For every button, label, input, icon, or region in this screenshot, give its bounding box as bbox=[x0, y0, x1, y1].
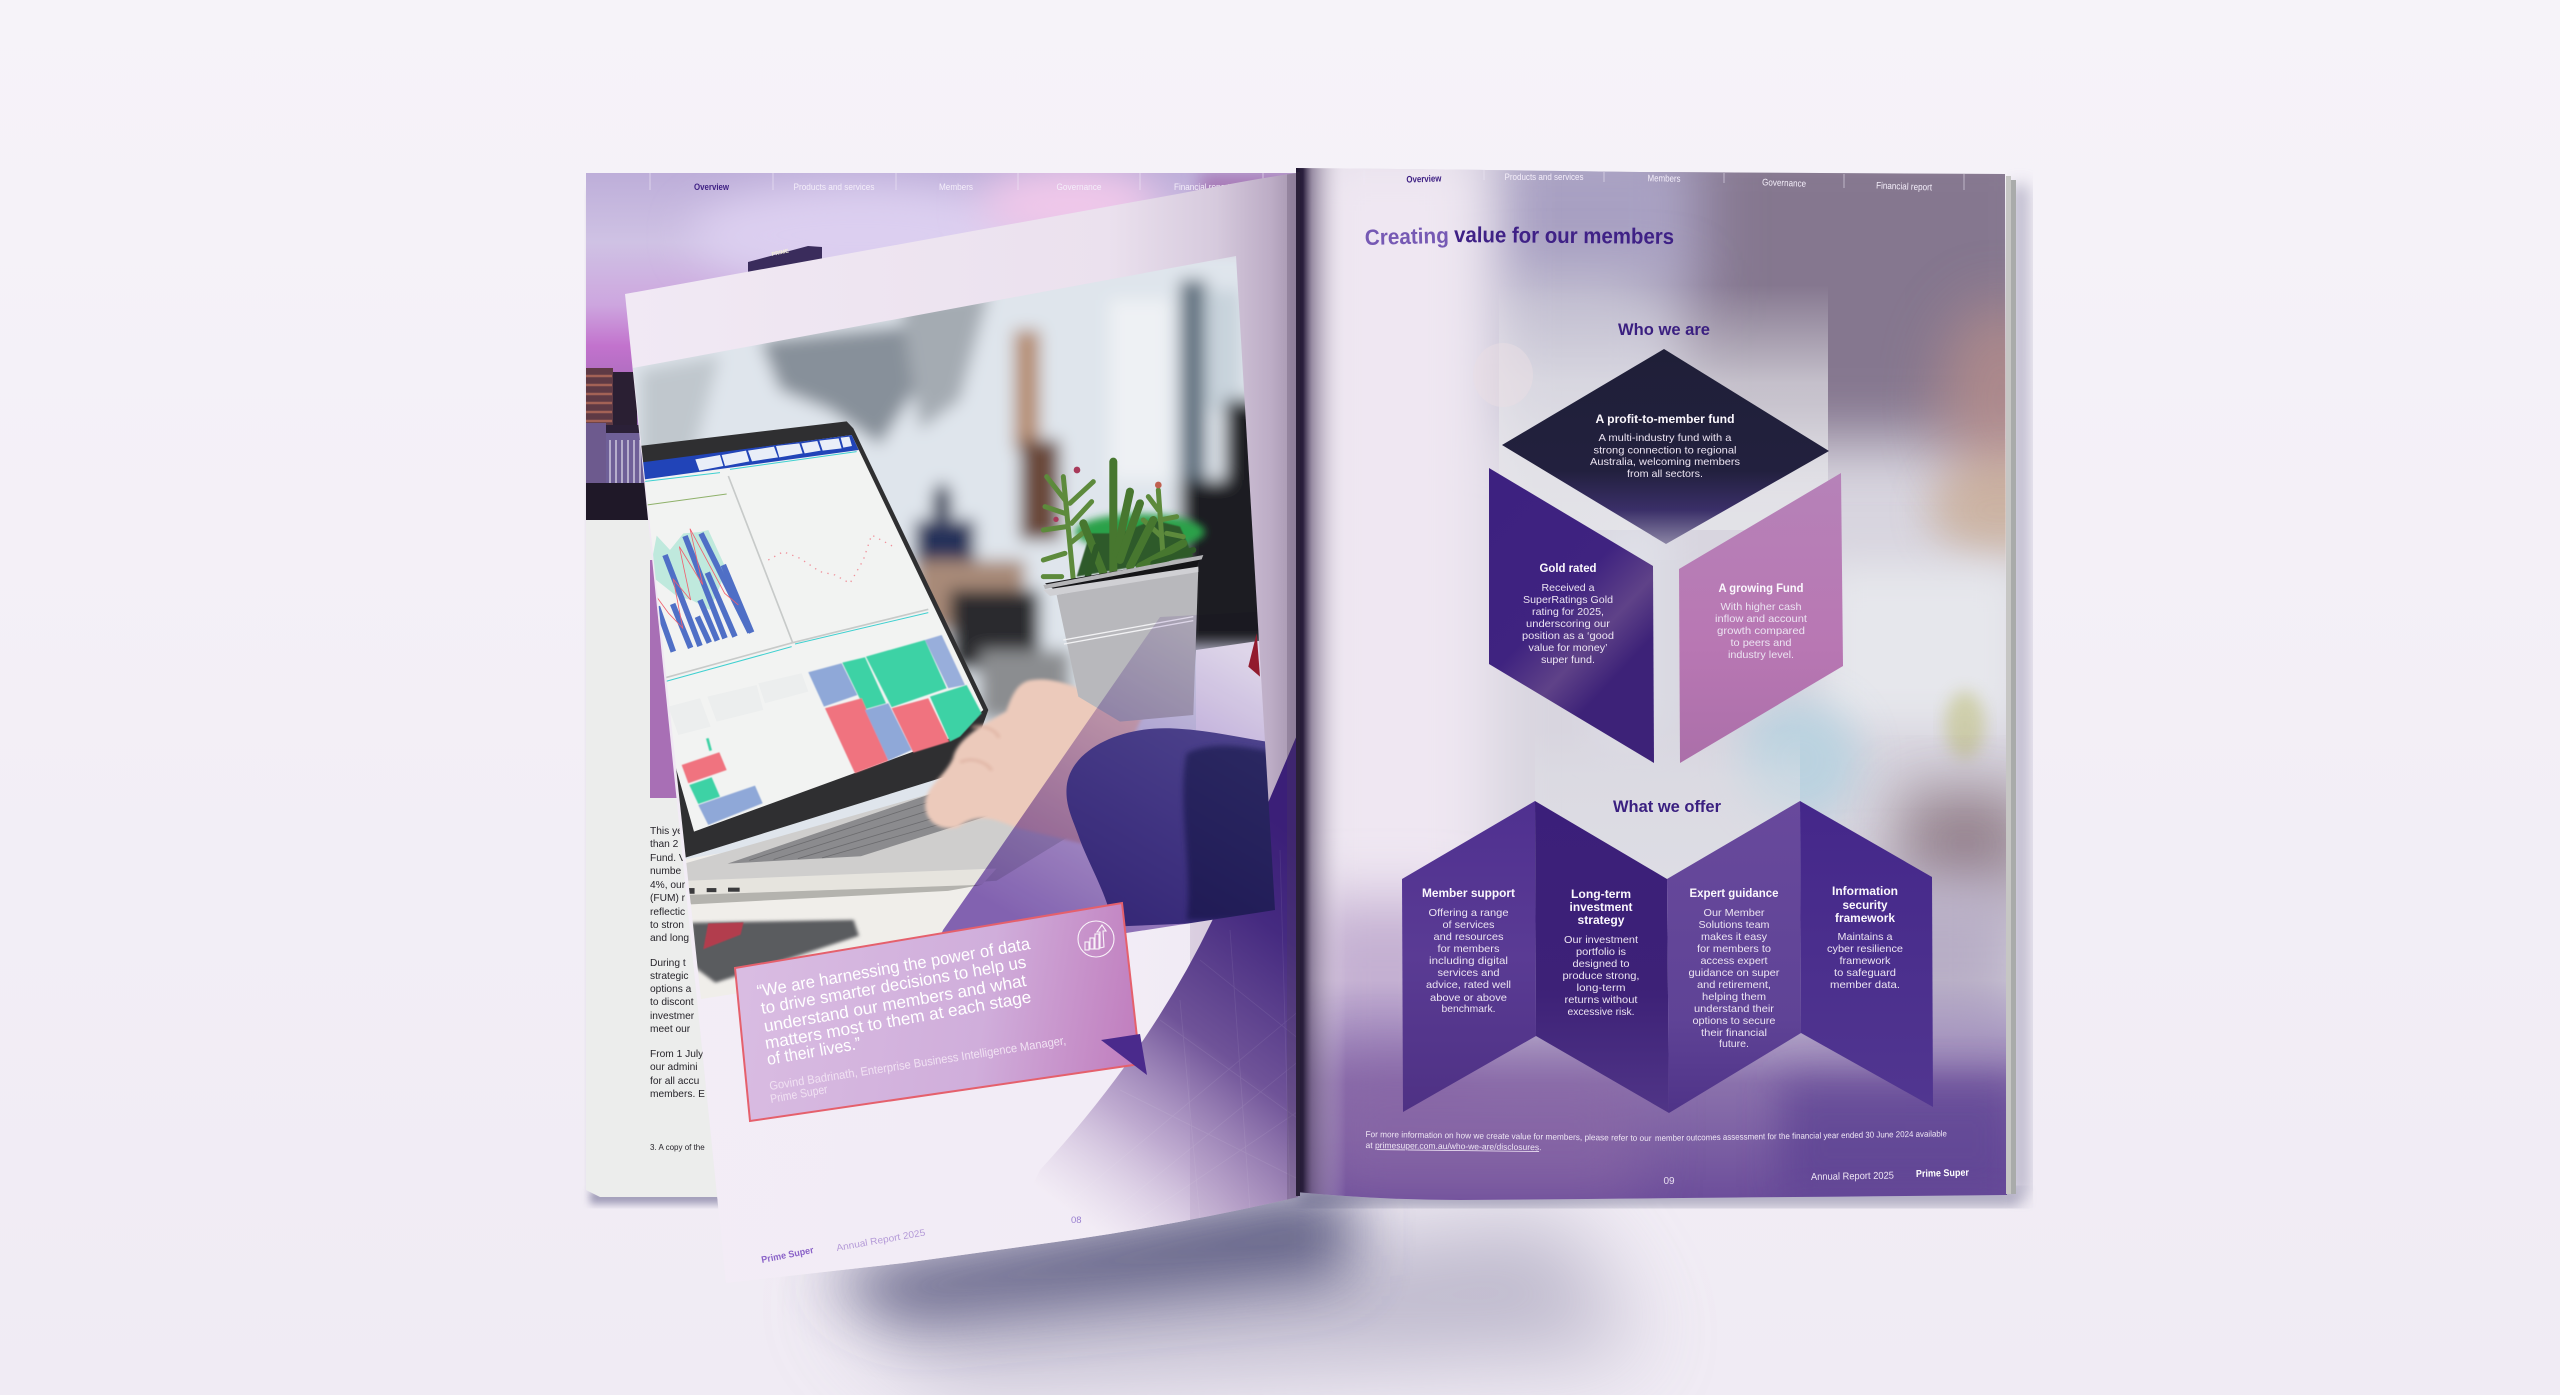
footer left bbox=[760, 1215, 1082, 1266]
panel: information security framework: framework bbox=[1840, 955, 1891, 967]
panel: information security framework: framework bbox=[1835, 913, 1896, 925]
dashboard chart: faint red dots bbox=[768, 535, 897, 583]
panel: gold rated: position as a ‘good bbox=[1522, 630, 1614, 642]
panel: long-term investment strategy: investment bbox=[1570, 902, 1633, 914]
photo: laptop on desk bbox=[620, 250, 1290, 1010]
heading: who we are: Who we are bbox=[1618, 320, 1710, 339]
quote text: of their lives.” bbox=[765, 1034, 863, 1069]
panel: gold rated: value for money’ bbox=[1528, 642, 1608, 654]
body text fragments left page: (FUM) r bbox=[650, 893, 686, 904]
city buildings bbox=[586, 368, 650, 520]
panel: information security framework: security bbox=[1842, 900, 1888, 912]
title: value for our members bbox=[1454, 222, 1674, 249]
spine bbox=[1296, 172, 1300, 1196]
panel: member support: services and bbox=[1438, 967, 1500, 979]
quote callout bbox=[735, 903, 1147, 1121]
building on sky: PRIME bbox=[771, 248, 790, 258]
body text fragments left page: options a bbox=[650, 984, 692, 995]
purple panel bbox=[650, 560, 810, 798]
nav tabs right bbox=[1364, 170, 1964, 193]
left underlying page bbox=[586, 167, 1300, 1197]
panel: information security framework bbox=[1800, 801, 1933, 1107]
panel: gold rated: super fund. bbox=[1541, 654, 1595, 666]
footnote: member outcomes assessment for the financial year ended 30 June 2024 available bbox=[1655, 1128, 1947, 1143]
blurred office background bbox=[633, 256, 1259, 859]
panel: gold rated: Received a bbox=[1542, 582, 1595, 594]
quote text: matters most to them at each stage bbox=[763, 987, 1033, 1053]
table bbox=[1196, 640, 1265, 742]
footer right: 09 bbox=[1663, 1176, 1675, 1187]
body text fragments left page: From 1 July bbox=[650, 1049, 704, 1060]
body text fragments left page: our admini bbox=[650, 1062, 698, 1073]
panel: long-term investment strategy: excessive risk. bbox=[1568, 1006, 1634, 1018]
dashboard chart: teal area bbox=[652, 530, 727, 610]
panel: expert guidance: future. bbox=[1719, 1038, 1749, 1050]
body text fragments left page: to stron bbox=[650, 920, 684, 931]
panel: information security framework: cyber resilience bbox=[1827, 943, 1903, 955]
body text fragments left page bbox=[650, 826, 705, 1152]
body text fragments left page: This ye bbox=[650, 826, 683, 837]
spine shadow bbox=[1296, 160, 1346, 1210]
panel: profit-to-member fund: Australia, welcoming members bbox=[1590, 456, 1740, 468]
curled left page bbox=[600, 160, 1310, 1300]
building on sky bbox=[748, 246, 822, 272]
blurred photo background bbox=[1300, 168, 2007, 1200]
nav tabs left: Products and services bbox=[794, 182, 875, 193]
panel: expert guidance: options to secure bbox=[1692, 1015, 1776, 1027]
panel: expert guidance: and retirement, bbox=[1697, 979, 1771, 991]
panel: member support: for members bbox=[1438, 943, 1500, 955]
panel: long-term investment strategy: strategy bbox=[1578, 915, 1625, 927]
bright green background blur bbox=[1075, 514, 1205, 550]
hand bbox=[925, 679, 1142, 844]
corner notch bbox=[1101, 1034, 1147, 1075]
body text fragments left page: than 2 bbox=[650, 839, 679, 850]
nav tabs left bbox=[650, 173, 1263, 193]
body text fragments left page: 4%, our bbox=[650, 880, 686, 891]
title: Creating bbox=[1364, 223, 1449, 250]
panel: long-term investment strategy: Long-term bbox=[1571, 889, 1631, 901]
attribution: Prime Super bbox=[769, 1082, 829, 1106]
panel: long-term investment strategy: portfolio is bbox=[1576, 946, 1626, 958]
panel: gold rated: rating for 2025, bbox=[1532, 606, 1604, 618]
footer left: Prime Super bbox=[760, 1245, 815, 1266]
quote text: to drive smarter decisions to help us bbox=[759, 953, 1028, 1018]
panel: profit-to-member fund: from all sectors. bbox=[1627, 468, 1703, 480]
laptop base bbox=[667, 758, 1103, 983]
spine darkening on page bbox=[1287, 173, 1298, 1200]
panel: profit-to-member fund bbox=[1502, 349, 1829, 544]
nav tabs right: Products and services bbox=[1504, 172, 1584, 183]
heading: what we offer: What we offer bbox=[1613, 797, 1721, 816]
panel: member support: advice, rated well bbox=[1426, 979, 1511, 991]
nav tabs right: Governance bbox=[1762, 177, 1806, 190]
panel: information security framework: to safeguard bbox=[1834, 967, 1896, 979]
panel: member support: benchmark. bbox=[1442, 1003, 1496, 1015]
panel: gold rated bbox=[1489, 468, 1654, 763]
leaves bbox=[1077, 520, 1193, 577]
panel dividers bbox=[663, 476, 928, 678]
phone on table bbox=[691, 920, 859, 983]
panel: member support: including digital bbox=[1429, 955, 1508, 967]
panel: member support: Member support bbox=[1422, 888, 1515, 900]
panel: member support: above or above bbox=[1430, 992, 1507, 1004]
widget blocks bbox=[682, 738, 763, 825]
body text fragments left page: investmer bbox=[650, 1011, 695, 1022]
panel: long-term investment strategy: Our investment bbox=[1564, 934, 1638, 946]
body text fragments left page: and long bbox=[650, 933, 689, 944]
nav tabs left: Governance bbox=[1056, 182, 1102, 193]
panel: expert guidance: guidance on super bbox=[1688, 967, 1780, 979]
body text fragments left page: meet our bbox=[650, 1024, 691, 1035]
metal pot bbox=[1057, 568, 1198, 722]
panel: expert guidance: helping them bbox=[1702, 991, 1766, 1003]
dashboard chart: red line bbox=[656, 529, 738, 628]
panel: information security framework: Maintains a bbox=[1838, 931, 1893, 943]
panel: growing fund: inflow and account bbox=[1715, 613, 1807, 625]
panel: expert guidance: understand their bbox=[1694, 1003, 1775, 1015]
center band bbox=[1473, 285, 1828, 890]
icon: bar chart in circle bbox=[1078, 921, 1114, 957]
panel: gold rated: Gold rated bbox=[1540, 563, 1596, 575]
footer left: 08 bbox=[1071, 1215, 1082, 1226]
body text fragments left page: Fund. V bbox=[650, 853, 686, 864]
panel: gold rated: underscoring our bbox=[1526, 618, 1611, 630]
nav tabs right: Financial report bbox=[1876, 181, 1933, 193]
purple corner shape bbox=[1044, 738, 1298, 1230]
body text fragments left page: During t bbox=[650, 958, 686, 969]
body text fragments left page: strategic bbox=[650, 971, 689, 982]
footnote bbox=[1365, 1128, 1947, 1152]
nav tabs right: Members bbox=[1647, 173, 1681, 185]
panel: expert guidance: their financial bbox=[1701, 1027, 1767, 1039]
translucent purple overlay bbox=[930, 610, 1290, 960]
panel: information security framework: Information bbox=[1832, 886, 1898, 898]
KPI cards bbox=[668, 673, 808, 735]
nav tabs left: Financial report bbox=[1174, 182, 1230, 193]
body text fragments left page: for all accu bbox=[650, 1076, 699, 1087]
pot rim inside bbox=[1045, 557, 1200, 593]
panel: growing fund bbox=[1679, 473, 1843, 763]
quote text: “We are harnessing the power of data bbox=[755, 934, 1032, 1001]
sleeve bbox=[1066, 633, 1280, 927]
panel: expert guidance: Expert guidance bbox=[1690, 888, 1778, 900]
panel: growing fund: growth compared bbox=[1717, 625, 1805, 637]
panel: profit-to-member fund: strong connection to regional bbox=[1594, 444, 1736, 456]
body text fragments left page: reflectic bbox=[650, 907, 685, 918]
footer left: Annual Report 2025 bbox=[836, 1227, 926, 1254]
footer right bbox=[1663, 1168, 1969, 1187]
right page bbox=[1296, 168, 2007, 1200]
potted plant bbox=[1043, 462, 1203, 722]
panel: growing fund: industry level. bbox=[1728, 649, 1794, 661]
panel: expert guidance: Our Member bbox=[1704, 907, 1765, 919]
dashboard chart: bars bbox=[657, 533, 752, 652]
screen bbox=[640, 435, 983, 832]
panel: long-term investment strategy: produce strong, bbox=[1562, 970, 1640, 982]
bezel bbox=[620, 421, 988, 858]
footnote: at primesuper.com.au/who-we-are/disclosures. bbox=[1365, 1140, 1542, 1152]
panel: member support: Offering a range bbox=[1428, 907, 1509, 919]
page paper bbox=[600, 160, 1310, 1300]
panel: long-term investment strategy bbox=[1535, 801, 1669, 1113]
right page content bbox=[1364, 170, 1969, 1187]
laptop screen and dashboard bbox=[620, 421, 988, 858]
body text fragments left page: to discont bbox=[650, 997, 694, 1008]
panel: information security framework: member data. bbox=[1830, 979, 1900, 991]
footnote: For more information on how we create value for members, please refer to our bbox=[1365, 1129, 1652, 1143]
panel: expert guidance bbox=[1667, 801, 1801, 1113]
attribution: Govind Badrinath, Enterprise Business Intelligence Manager, bbox=[768, 1033, 1067, 1093]
nav tabs left: Overview bbox=[694, 182, 730, 193]
panel: growing fund: A growing Fund bbox=[1718, 583, 1804, 595]
nav tabs left: Members bbox=[939, 182, 973, 193]
body text fragments left page: members. E bbox=[650, 1089, 705, 1100]
panel: expert guidance: for members to bbox=[1697, 943, 1771, 955]
panel: expert guidance: Solutions team bbox=[1698, 919, 1770, 931]
panel: long-term investment strategy: long-term bbox=[1576, 982, 1626, 994]
panel: expert guidance: makes it easy bbox=[1701, 931, 1768, 943]
quote text: understand our members and what bbox=[762, 971, 1028, 1036]
footer right: Annual Report 2025 bbox=[1811, 1171, 1894, 1183]
body text fragments left page: numbe bbox=[650, 866, 681, 877]
footer right: Prime Super bbox=[1916, 1168, 1969, 1180]
panel: profit-to-member fund: A profit-to-member fund bbox=[1596, 414, 1734, 426]
body text fragments left page: 3. A copy of the bbox=[650, 1143, 705, 1152]
spread shadow bbox=[586, 185, 2028, 1380]
panel: growing fund: With higher cash bbox=[1720, 601, 1802, 613]
panel: expert guidance: access expert bbox=[1700, 955, 1768, 967]
panel: member support: and resources bbox=[1434, 931, 1504, 943]
panel: member support bbox=[1402, 801, 1536, 1112]
title bbox=[1364, 222, 1674, 250]
panel: member support: of services bbox=[1442, 919, 1494, 931]
right page edge stack bbox=[2006, 176, 2016, 1194]
cover photo: dusk city sky bbox=[586, 167, 1300, 520]
panel: long-term investment strategy: returns without bbox=[1564, 994, 1638, 1006]
panel: gold rated: SuperRatings Gold bbox=[1523, 594, 1613, 606]
panel: growing fund: to peers and bbox=[1730, 637, 1792, 649]
panel: profit-to-member fund: A multi-industry fund with a bbox=[1598, 432, 1732, 444]
nav tabs right: Overview bbox=[1406, 173, 1442, 186]
blue header bbox=[640, 435, 859, 480]
panel: long-term investment strategy: designed to bbox=[1572, 958, 1630, 970]
page paper bbox=[586, 173, 1296, 1197]
treemap bbox=[808, 635, 982, 773]
quote text bbox=[755, 934, 1033, 1069]
